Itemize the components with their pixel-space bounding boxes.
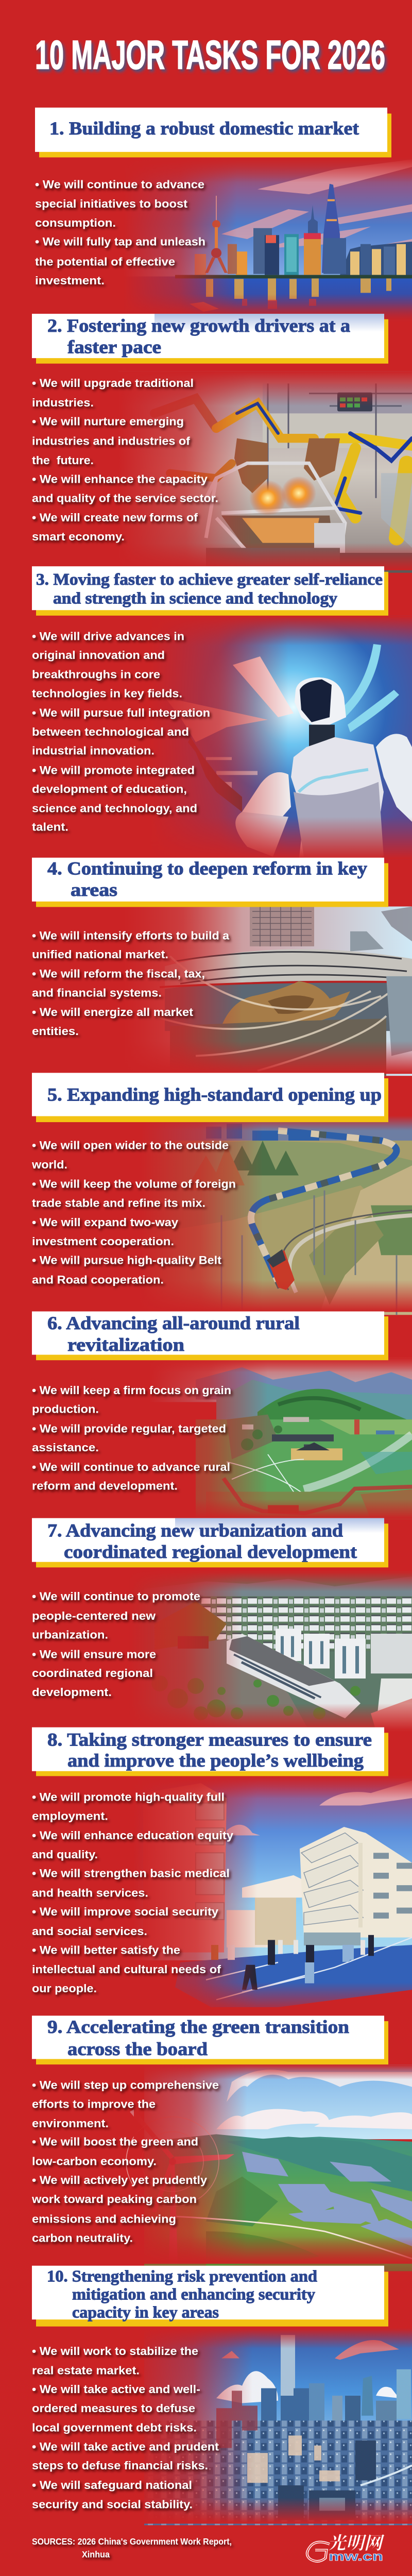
text: task 7 bullets: coordinated regional xyxy=(32,1667,153,1680)
heading 9: across the board xyxy=(67,2039,208,2059)
text: task 10 bullets: • We will take active and prudent xyxy=(32,2441,219,2453)
text: task 7 bullets xyxy=(32,1590,200,1699)
text: task 3 bullets: science and technology, and xyxy=(32,802,197,815)
text: task 1 bullets: • We will fully tap and unleash xyxy=(35,235,205,248)
text: task 3 bullets xyxy=(32,630,210,833)
text: task 5 bullets: • We will expand two-way xyxy=(32,1216,178,1229)
heading 2: faster pace xyxy=(67,337,161,357)
text: task 7 bullets: • We will ensure more xyxy=(32,1648,156,1660)
text: task 6 bullets: • We will keep a firm focus on grain xyxy=(32,1384,231,1397)
text: task 10 bullets: real estate market. xyxy=(32,2364,140,2377)
text: task 9 bullets: emissions and achieving xyxy=(32,2213,176,2225)
text: task 7 bullets: people-centered new xyxy=(32,1609,156,1622)
logo: Guangming Online: 光明网 xyxy=(328,2529,385,2555)
text: task 10 bullets: security and social stability. xyxy=(32,2498,193,2511)
heading 9 xyxy=(32,2015,388,2064)
text: task 6 bullets: assistance. xyxy=(32,1441,99,1454)
text: task 8 bullets: and quality. xyxy=(32,1848,98,1861)
text: task 2 bullets xyxy=(32,377,218,543)
text: task 3 bullets: technologies in key fields. xyxy=(32,687,182,700)
text: task 2 bullets: • We will enhance the capacity xyxy=(32,473,208,486)
text: task 9 bullets xyxy=(31,2079,219,2244)
text: task 9 bullets: • We will actively yet prudently xyxy=(32,2174,207,2187)
heading 2: 2. Fostering new growth drivers at a xyxy=(47,315,350,336)
text: task 4 bullets: • We will energize all market xyxy=(32,1006,193,1019)
text: task 5 bullets: trade stable and refine its mix. xyxy=(32,1197,205,1209)
heading 2 xyxy=(32,314,388,364)
text: task 6 bullets: • We will continue to advance rural xyxy=(32,1461,230,1473)
text: task 7 bullets: development. xyxy=(32,1686,112,1699)
text: task 8 bullets: • We will promote high-quality full xyxy=(32,1791,225,1804)
text: task 2 bullets: smart economy. xyxy=(32,530,125,543)
text: task 10 bullets: steps to defuse financial risks. xyxy=(32,2459,208,2472)
illustration: rural landscape xyxy=(149,1357,412,1519)
text: task 2 bullets: • We will upgrade traditional xyxy=(32,377,194,389)
text: task 1 bullets: special initiatives to boost xyxy=(35,197,187,210)
text: task 3 bullets: breakthroughs in core xyxy=(32,668,160,681)
heading 3: and strength in science and technology xyxy=(53,589,337,608)
heading 4: areas xyxy=(71,880,117,900)
text: task 7 bullets: urbanization. xyxy=(32,1629,108,1641)
text: task 8 bullets xyxy=(32,1791,233,1995)
text: task 8 bullets: and health services. xyxy=(32,1887,148,1899)
illustration: new urbanization town xyxy=(129,1571,412,1731)
logo: Guangming Online: mw.cn xyxy=(329,2550,383,2564)
text: task 8 bullets: • We will strengthen basic medical xyxy=(32,1867,230,1880)
heading 10: 10. Strengthening risk prevention and xyxy=(47,2267,317,2286)
sources note xyxy=(32,2536,232,2560)
text: task 2 bullets: the future. xyxy=(32,454,94,467)
heading 10: capacity in key areas xyxy=(72,2303,219,2321)
text: task 3 bullets: development of education, xyxy=(32,783,187,795)
text: task 6 bullets: production. xyxy=(32,1403,99,1416)
text: task 1 bullets xyxy=(35,178,205,287)
logo: Guangming Online xyxy=(307,2529,385,2564)
text: task 3 bullets: original innovation and xyxy=(32,649,165,662)
text: task 10 bullets: • We will work to stabilize the xyxy=(32,2345,198,2358)
heading 5: 5. Expanding high-standard opening up xyxy=(47,1084,382,1105)
heading 10: mitigation and enhancing security xyxy=(72,2285,315,2303)
illustration: freight train and railway xyxy=(139,1116,412,1315)
text: task 9 bullets: low-carbon economy. xyxy=(32,2155,157,2167)
text: task 3 bullets: • We will pursue full integration xyxy=(32,706,210,719)
text: task 8 bullets: • We will improve social security xyxy=(32,1905,218,1918)
text: task 3 bullets: between technological and xyxy=(32,725,189,738)
text: task 9 bullets: environment. xyxy=(32,2117,109,2130)
text: task 10 bullets: ordered measures to defuse xyxy=(32,2402,195,2415)
illustration: school and basketball court xyxy=(134,1776,412,2015)
heading 7: coordinated regional development xyxy=(64,1542,357,1562)
heading 6: 6. Advancing all-around rural xyxy=(47,1313,300,1333)
heading 8: 8. Taking stronger measures to ensure xyxy=(47,1730,372,1750)
text: task 2 bullets: • We will nurture emerging xyxy=(32,415,184,428)
text: task 9 bullets: • We will boost the green and xyxy=(32,2136,198,2148)
text: task 3 bullets: • We will drive advances in xyxy=(32,630,184,642)
text: task 1 bullets: • We will continue to advance xyxy=(35,178,204,191)
heading 6: revitalization xyxy=(67,1334,184,1355)
text: task 2 bullets: • We will create new forms of xyxy=(32,512,198,524)
text: task 8 bullets: our people. xyxy=(32,1982,97,1995)
text: task 1 bullets: investment. xyxy=(35,274,105,287)
text: task 2 bullets: industries and industries of xyxy=(32,435,190,447)
sources note: Xinhua xyxy=(82,2550,110,2560)
text: task 9 bullets: • We will step up comprehensive xyxy=(32,2079,219,2091)
text: task 4 bullets: • We will reform the fiscal, tax, xyxy=(32,968,205,980)
heading 3: 3. Moving faster to achieve greater self-reliance xyxy=(36,570,383,589)
heading 7 xyxy=(32,1518,388,1567)
text: task 10 bullets: • We will safeguard national xyxy=(32,2479,192,2492)
text: task 5 bullets: • We will pursue high-quality Belt xyxy=(32,1254,221,1267)
text: task 9 bullets: efforts to improve the xyxy=(32,2098,156,2110)
text: task 5 bullets: investment cooperation. xyxy=(32,1235,174,1248)
text: task 3 bullets: industrial innovation. xyxy=(32,744,154,757)
illustration: Shanghai skyline xyxy=(124,157,412,322)
illustration: humanoid robot xyxy=(149,616,412,861)
illustration: robot car factory xyxy=(118,371,412,573)
text: task 10 bullets xyxy=(32,2345,219,2511)
illustration: stock exchange with bull xyxy=(124,906,412,1076)
illustration: green landscape with wind turbine xyxy=(126,2064,412,2271)
heading 3 xyxy=(32,566,388,616)
text: task 1 bullets: the potential of effective xyxy=(35,256,175,268)
text: task 8 bullets: • We will enhance education equity xyxy=(32,1829,233,1842)
text: task 9 bullets: work toward peaking carbon xyxy=(31,2193,197,2206)
heading 6 xyxy=(32,1311,388,1360)
heading 7: 7. Advancing new urbanization and xyxy=(47,1520,343,1540)
text: task 4 bullets: unified national market. xyxy=(32,948,168,961)
text: task 2 bullets: industries. xyxy=(32,396,94,409)
sources note: SOURCES: 2026 China's Government Work Report, xyxy=(32,2536,232,2547)
text: task 2 bullets: and quality of the service sector. xyxy=(32,492,218,504)
text: task 5 bullets: and Road cooperation. xyxy=(32,1274,164,1286)
text: task 8 bullets: employment. xyxy=(32,1810,108,1822)
heading 10 xyxy=(32,2266,388,2327)
text: task 8 bullets: • We will better satisfy the xyxy=(32,1944,180,1956)
heading 4: 4. Continuing to deepen reform in key xyxy=(47,858,367,878)
heading 8 xyxy=(32,1727,388,1776)
text: task 4 bullets xyxy=(32,929,229,1038)
text: task 5 bullets: world. xyxy=(31,1158,67,1171)
text: task 1 bullets: consumption. xyxy=(35,216,116,229)
text: task 10 bullets: local government debt risks. xyxy=(32,2421,197,2434)
text: task 6 bullets: • We will provide regular, targeted xyxy=(32,1422,226,1435)
illustration: Beijing city skyline xyxy=(134,2329,412,2525)
text: task 5 bullets: • We will keep the volume of foreign xyxy=(32,1178,236,1191)
text: task 5 bullets: • We will open wider to the outside xyxy=(32,1139,229,1151)
heading 1 xyxy=(35,108,391,157)
heading 8: and improve the people’s wellbeing xyxy=(67,1751,364,1771)
text: task 10 bullets: • We will take active and well- xyxy=(32,2383,200,2396)
text: task 4 bullets: entities. xyxy=(32,1025,79,1038)
text: task 3 bullets: talent. xyxy=(32,821,68,833)
text: task 5 bullets xyxy=(31,1139,236,1286)
heading 5 xyxy=(32,1073,388,1122)
text: task 6 bullets xyxy=(32,1384,231,1492)
text: task 4 bullets: • We will intensify efforts to build a xyxy=(32,929,229,942)
text: task 9 bullets: carbon neutrality. xyxy=(32,2232,133,2244)
text: task 4 bullets: and financial systems. xyxy=(32,987,162,999)
text: task 3 bullets: • We will promote integrated xyxy=(32,764,195,776)
text: task 8 bullets: intellectual and cultural needs of xyxy=(32,1963,221,1976)
text: task 7 bullets: • We will continue to promote xyxy=(32,1590,200,1603)
heading 9: 9. Accelerating the green transition xyxy=(47,2017,349,2037)
text: task 8 bullets: and social services. xyxy=(32,1925,147,1938)
heading 4 xyxy=(32,858,388,907)
heading 1: 1. Building a robust domestic market xyxy=(49,118,359,139)
text: task 6 bullets: reform and development. xyxy=(32,1480,178,1492)
